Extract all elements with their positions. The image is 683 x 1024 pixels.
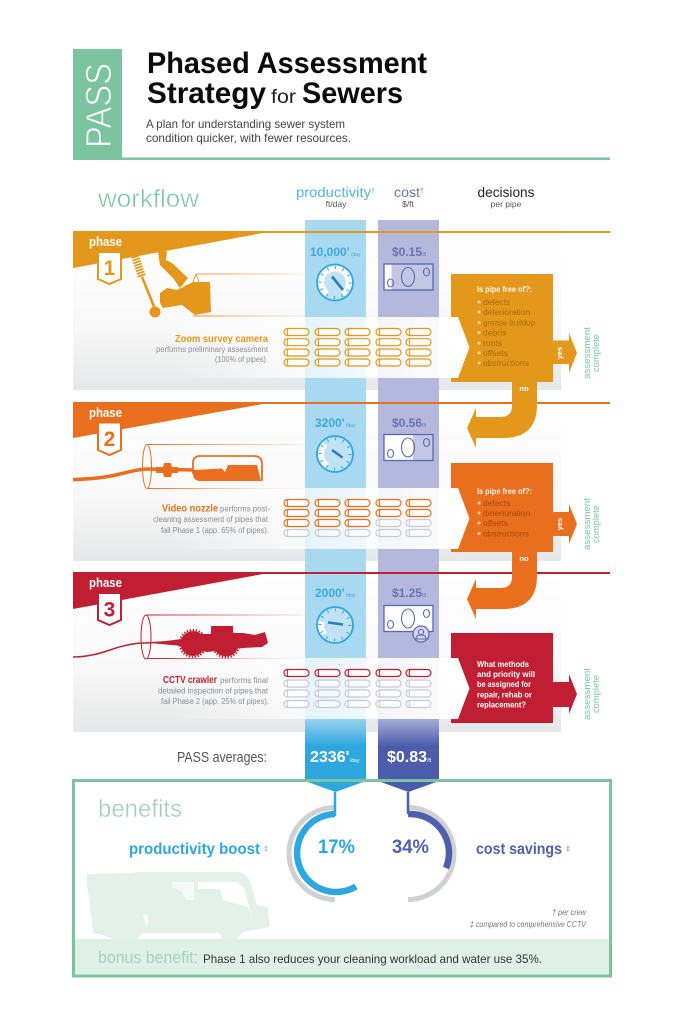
title: for [271,87,297,108]
decision box: phase 3 [451,633,553,723]
description: video nozzle [153,502,270,535]
cost column with average: /ft [427,758,432,764]
column heading: productivity [296,184,375,209]
bonus benefit [98,948,542,967]
phase 3 rule and banner [73,572,610,609]
phase 3 badge: 3 [104,598,115,622]
footnotes: ‡ compared to comprehensive CCTV [470,920,587,929]
phase 2 label: phase [89,406,122,420]
decision box: phase 3: be assigned for [477,679,532,689]
bonus benefit: bonus benefit: [98,948,198,967]
column heading: cost: $/ft [402,199,415,209]
phase 2 badge [98,422,121,455]
column heading: decisions [478,184,534,209]
icon: video nozzle in pipe [73,444,305,488]
decision box: phase 3: and priority will [477,669,535,679]
description: CCTV crawler: fail Phase 2 (app. 25% of pipes). [161,697,269,706]
decision box: phase 2: deterioration [483,508,531,518]
phase 2 badge: 2 [104,428,115,451]
description: zoom survey camera: performs preliminary assessment [156,345,269,354]
column heading: productivity: ft/day [326,199,347,209]
decision box: phase 1: Is pipe free of?: [477,284,532,294]
title [147,47,427,110]
description: zoom survey camera [156,333,269,364]
decision box: phase 3: replacement? [477,700,526,710]
arrow: no from phase 1 to phase 2 [467,382,537,448]
phase 1 label: phase [89,235,122,249]
panel background: phase 1 [73,233,561,390]
label: productivity boost: productivity boost [129,841,261,858]
productivity: 10,000 ft/day: 10,000' [310,245,350,259]
icon: CCTV crawler in pipe [73,615,305,659]
decision box: phase 1: defects [483,297,510,307]
phase 2 rule and banner [73,402,610,438]
label: assessment complete phase 2: complete [591,505,602,543]
label: assessment complete phase 2 [582,498,602,550]
description: zoom survey camera: (100% of pipes). [215,355,268,364]
productivity: 3200 ft/day: /day [346,423,356,429]
description: CCTV crawler [158,674,269,706]
panel background: phase 2 [73,404,561,561]
decision box: phase 1: offsets [483,348,508,358]
label: cost savings: ‡ [566,846,570,853]
arrow: no from phase 1 to phase 2: no [519,384,529,393]
cost column with average: $0.83 [387,749,427,766]
panel: benefits [73,780,610,976]
phase 1 badge: 1 [104,257,116,280]
subtitle [146,117,351,145]
cost column with average [378,220,439,792]
column heading: decisions: per pipe [491,199,522,209]
phase 3 badge [98,593,121,625]
decision box: phase 3: What methods [477,659,529,669]
decision box: phase 1: obstructions [483,358,529,368]
decision box: phase 1: grease buildup [483,318,535,328]
phase 1 [73,231,610,382]
label: assessment complete phase 2: assessment [582,498,593,550]
cost: $0.56 per ft: /ft [422,423,427,429]
productivity column with average: /day [350,758,360,764]
panel background: phase 3 [73,574,561,732]
label: assessment complete phase 3: complete [591,675,602,713]
arrow: yes phase 2 [553,504,577,544]
chart: cost ring 34%: 34% [392,837,429,858]
productivity: 2000 ft/day: /day [346,593,356,599]
decision box: phase 1: deterioration [483,307,531,317]
chart: productivity ring 17%: 17% [318,837,355,858]
arrow: no from phase 2 to phase 3 [467,552,537,619]
title: Sewers [302,77,403,110]
description: zoom survey camera: Zoom survey camera [175,333,268,345]
header rule [73,158,610,160]
title: Phased Assessment [147,47,427,80]
icon: gauge phase 3 [317,607,353,643]
column heading: productivity: † [371,188,375,195]
subtitle: condition quicker, with fewer resources. [146,131,351,145]
icon: gauge phase 1 [317,264,353,300]
decision box: phase 2: defects [483,498,510,508]
subtitle: A plan for understanding sewer system [146,117,345,131]
description: CCTV crawler: CCTV crawler [163,674,217,686]
white band [170,658,470,719]
description: CCTV crawler: performs final [220,676,268,685]
phase 3 label: phase [89,576,122,590]
title: Strategy [147,77,266,110]
label: assessment complete phase 1: complete [591,334,602,372]
pipe grid: 65% of pipes [284,500,431,536]
icon: gauge phase 2 [317,436,353,472]
arrow: no from phase 2 to phase 3: no [519,554,529,563]
icon: money phase 2 [384,434,433,460]
label: cost savings: cost savings [476,841,562,858]
description: video nozzle: fail Phase 1 (app. 65% of pipes). [161,526,269,535]
description: CCTV crawler: detailed inspection of pipes that [158,686,269,696]
footnotes: † per crew [552,908,587,917]
column heading: cost [394,184,424,209]
cost: $0.15 per ft: /ft [422,252,427,258]
arrow: yes phase 2: yes [555,518,564,530]
arrow: yes phase 1: yes [555,347,564,359]
column heading: cost: † [420,188,424,195]
header block: PASS: PASS [78,63,119,148]
decision box: phase 2: obstructions [483,528,529,538]
arrow: yes phase 1 [553,333,577,373]
label: assessment complete phase 1 [582,327,602,379]
label: assessment complete phase 3: assessment [582,668,593,720]
heading: workflow: workflow [97,185,200,213]
chart: cost ring 34% [392,792,454,900]
productivity column with average: 2336' [310,749,349,766]
phase 3 [73,572,610,723]
productivity: 10,000 ft/day: /day [351,252,361,258]
column heading: decisions: decisions [478,184,534,200]
footnotes [470,908,587,929]
frame [74,780,610,976]
productivity: 2000 ft/day: 2000' [315,586,345,600]
description: video nozzle: Video nozzle [162,502,218,514]
column heading: productivity: productivity [296,184,371,200]
decision box: phase 2: offsets [483,518,508,528]
icon: truck silhouette [87,872,270,939]
white band [170,488,470,549]
phase 2 [73,402,610,552]
cost: $1.25 per ft: $1.25 [392,586,422,600]
decision box: phase 1: debris [483,328,506,338]
arrow: final phase 3 [553,674,577,714]
icon: money phase 1 [384,264,433,290]
description: video nozzle: performs post- [220,504,270,514]
decision box: phase 3: repair, rehab or [477,690,533,700]
decision box: phase 1 [451,274,553,382]
icon: money phase 3 with crew [384,606,433,642]
cost: $1.25 per ft: /ft [422,593,427,599]
label: PASS averages: PASS averages: [177,750,267,766]
label: assessment complete phase 1: assessment [582,327,593,379]
productivity: 3200 ft/day: 3200' [315,416,345,430]
decision box: phase 2: Is pipe free of?: [477,486,532,496]
pipe grid: 25% of pipes [284,670,431,708]
bonus benefit: Phase 1 also reduces your cleaning workload and water use 35%. [203,952,542,966]
icon: zoom survey camera [135,251,305,318]
phase 1 rule and banner [73,231,610,268]
decision box: phase 2 [451,463,553,552]
phase 1 badge [98,252,121,284]
cost: $0.15 per ft: $0.15 [392,245,422,259]
chart: productivity ring 17% [289,792,356,900]
column heading: cost: cost [394,184,420,200]
label: assessment complete phase 3 [582,668,602,720]
label: productivity boost: ‡ [264,846,268,853]
bonus band [73,939,610,975]
white band [170,317,470,378]
productivity column with average [305,220,366,792]
pipe grid: 100% of pipes [284,328,431,366]
description: video nozzle: cleaning assessment of pipes that [153,515,269,524]
heading: benefits: benefits [98,795,182,823]
decision box: phase 1: roots [483,338,502,348]
cost: $0.56 per ft: $0.56 [392,416,422,430]
